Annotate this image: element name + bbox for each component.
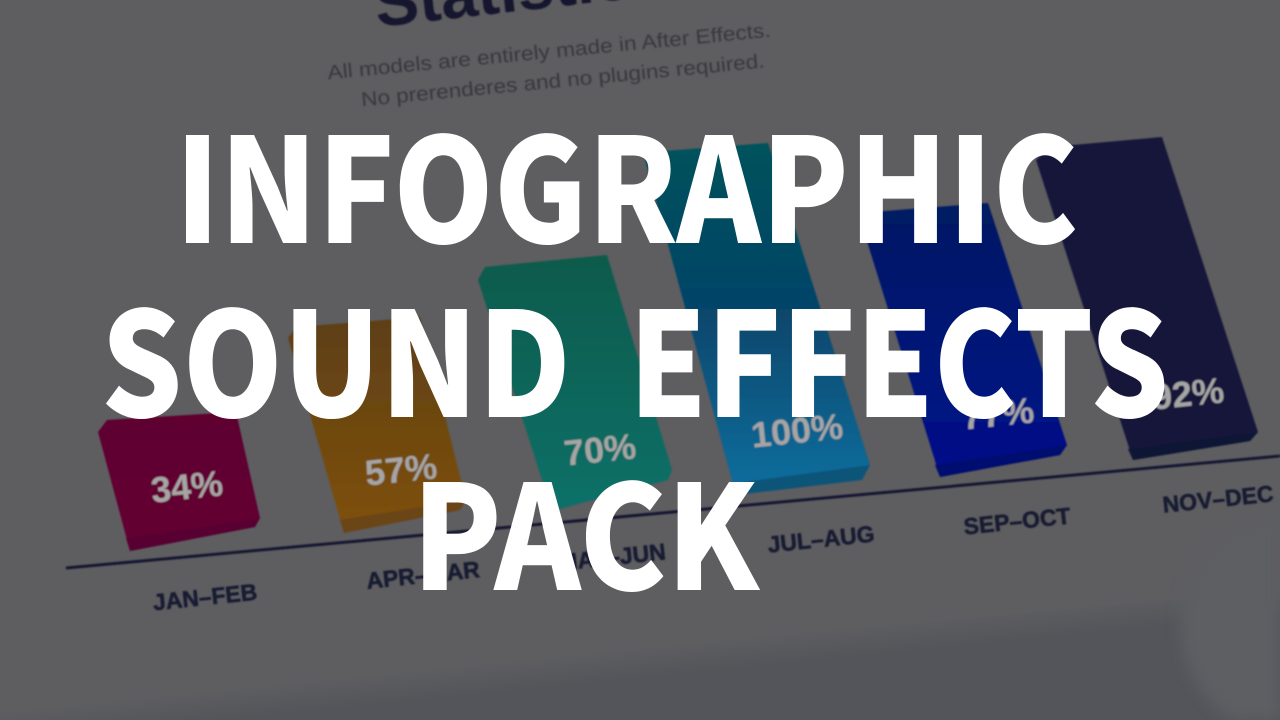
bar: JAN-FEB 34%: 34% <box>149 462 225 511</box>
subheading text <box>327 20 774 114</box>
title overlay: PACK <box>412 422 760 632</box>
axis labels: NOV–DEC <box>1161 480 1275 518</box>
title overlay: EFFECTS <box>629 249 1169 459</box>
subheading text: All models are entirely made in After Effects. <box>327 20 772 84</box>
axis labels: MAY–JUN <box>557 538 667 576</box>
bar: SEP-OCT 77% <box>862 203 1067 477</box>
bar: NOV-DEC 92% <box>1036 137 1258 460</box>
subheading text: No prerenderes and no plugins required. <box>360 50 765 111</box>
bar: MAR-APR 57%: 57% <box>363 445 439 494</box>
bar: NOV-DEC 92%: 92% <box>1150 369 1226 418</box>
bar: MAR-APR 57% <box>288 317 466 533</box>
bottom band <box>0 590 1280 720</box>
bar: JUL-AUG 100%: 100% <box>749 405 845 456</box>
axis labels: JUL–AUG <box>766 520 876 558</box>
bar: MAY-JUN 70% <box>478 255 672 511</box>
bar: SEP-OCT 77%: 77% <box>960 389 1036 438</box>
bar: MAY-JUN 70%: 70% <box>562 425 638 474</box>
title overlay: INFOGRAPHIC <box>175 75 1078 285</box>
axis line <box>66 456 1280 568</box>
title overlay: SOUND <box>101 249 571 459</box>
bar: JUL-AUG 100% <box>645 143 870 495</box>
axis labels: SEP–OCT <box>962 502 1072 540</box>
bar: JAN-FEB 34% <box>98 412 260 551</box>
axis labels <box>152 480 1275 615</box>
axis labels: JAN–FEB <box>152 579 258 615</box>
title overlay <box>101 75 1169 632</box>
decorative circle <box>1181 514 1280 720</box>
axis labels: APR–MAR <box>365 556 481 594</box>
